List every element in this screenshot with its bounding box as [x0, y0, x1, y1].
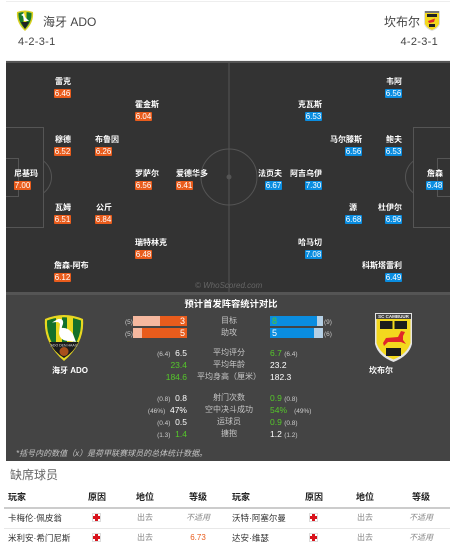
stat: shots label: 射门次数 — [213, 393, 245, 402]
player: away goalkeeper: 詹森 — [427, 169, 443, 178]
row: right 2: 达安·维瑟 — [232, 533, 269, 543]
stat: average age away: 23.2 — [270, 360, 287, 370]
missing players section — [0, 461, 450, 553]
player: home: 雷克 — [55, 77, 71, 86]
player: home — [176, 169, 208, 190]
player: away — [345, 203, 362, 224]
goals bar: home — [125, 316, 187, 326]
table headers: left — [0, 491, 225, 503]
watermark: © WhoScored.com — [195, 281, 262, 290]
player: away — [378, 203, 402, 224]
player: away: 克瓦斯 — [298, 100, 322, 109]
row: left 1 — [0, 512, 225, 524]
icon: injury — [309, 513, 318, 522]
player: away — [362, 261, 402, 282]
player: away: 韦阿 — [386, 77, 402, 86]
icon: ADO crest small — [16, 10, 34, 31]
assists bar: away: 5 — [272, 328, 277, 338]
player: away: 6.49 — [386, 273, 401, 282]
home team name: 海牙 ADO — [43, 15, 96, 29]
player: away: 6.53 — [386, 147, 401, 156]
goals bar: away: (9) — [324, 319, 332, 326]
stat: average rating away: 6.7 (6.4) — [270, 348, 298, 358]
icon: injury — [92, 513, 101, 522]
assists bar: home: 5 — [180, 328, 185, 338]
stats title: 预计首发阵容统计对比 — [185, 299, 277, 309]
player: away — [298, 100, 322, 121]
player: away: 杜伊尔 — [378, 203, 402, 212]
player: away — [290, 169, 322, 190]
stat: shots home: (0.8) 0.8 — [157, 393, 187, 403]
row: right 1: 不适用 — [409, 513, 433, 522]
player: away: 6.56 — [346, 147, 361, 156]
player: home: 穆德 — [55, 135, 71, 144]
stat: average height away: 182.3 — [270, 372, 291, 382]
stat: shots away: 0.9 (0.8) — [270, 393, 298, 403]
player: home: 罗萨尔 — [135, 169, 159, 178]
row: left 1: 卡梅伦·佩皮翁 — [8, 513, 62, 523]
player: away: 7.08 — [306, 250, 321, 259]
player: away goalkeeper: 6.48 — [427, 181, 442, 190]
away formation: 4-2-3-1 — [400, 36, 438, 48]
player: home: 6.04 — [136, 112, 151, 121]
away team name: 坎布尔 — [384, 15, 420, 29]
stat: average height label: 平均身高（厘米） — [197, 372, 261, 381]
player: home: 6.56 — [136, 181, 151, 190]
player: away goalkeeper — [426, 169, 443, 190]
row: right 2 — [225, 532, 450, 544]
player: away: 6.68 — [346, 215, 361, 224]
assists bar: home: (5) — [125, 331, 133, 338]
row: left 2: 出去 — [137, 533, 153, 542]
row: right 2: 不适用 — [409, 533, 433, 542]
player: away: 6.96 — [386, 215, 401, 224]
player: home: 布鲁因 — [95, 135, 119, 144]
icon: Cambuur crest large: SC CAMBUUR — [378, 314, 410, 319]
goals bar: away — [270, 316, 332, 326]
pitch markings — [6, 63, 450, 292]
stat: average age home: 23.4 — [170, 360, 187, 370]
stats comparison panel — [6, 295, 450, 461]
stat: tackles label: 搪抱 — [221, 429, 237, 438]
assists bar: home — [125, 328, 187, 338]
player: home: 6.46 — [55, 89, 70, 98]
player: home goalkeeper — [14, 169, 38, 190]
table headers: right: 玩家 — [232, 492, 250, 502]
player: home: 6.26 — [96, 147, 111, 156]
away team label: 坎布尔 — [369, 366, 393, 375]
player: home goalkeeper: 尼基玛 — [14, 169, 38, 178]
row: left 1: 出去 — [137, 513, 153, 522]
player: away: 阿吉乌伊 — [290, 169, 322, 178]
player: home: 爱德华多 — [176, 169, 208, 178]
stat: dribbles label: 运球员 — [217, 417, 241, 426]
player: home — [54, 77, 71, 98]
player: away — [298, 238, 322, 259]
player: home: 6.41 — [177, 181, 192, 190]
player: home — [135, 169, 159, 190]
player: home goalkeeper: 7.00 — [15, 181, 30, 190]
stat: dribbles home: (0.4) 0.5 — [157, 417, 187, 427]
player: away — [385, 135, 402, 156]
player: home: 6.84 — [96, 215, 111, 224]
player: away — [258, 169, 282, 190]
player: home: 6.12 — [55, 273, 70, 282]
stat: average height home: 184.6 — [166, 372, 187, 382]
header: teams and formations — [6, 1, 450, 61]
row: right 2: 出去 — [357, 533, 373, 542]
stat: aerials label: 空中决斗成功 — [205, 405, 253, 414]
player: home: 公斤 — [96, 203, 112, 212]
icon: Cambuur crest small — [424, 11, 440, 31]
table headers: right — [225, 491, 450, 503]
assists bar: away — [270, 328, 332, 338]
player: home: 6.48 — [136, 250, 151, 259]
section heading: 缺席球员 — [10, 468, 58, 482]
player: home: 詹森-阿布 — [54, 261, 89, 270]
player: away: 7.30 — [306, 181, 321, 190]
player: away: 6.67 — [266, 181, 281, 190]
table headers: right: 原因 — [305, 492, 323, 502]
stat: tackles away: 1.2 (1.2) — [270, 429, 298, 439]
player: away: 源 — [349, 203, 357, 212]
icon: injury — [92, 533, 101, 542]
player: home — [135, 238, 167, 259]
assists label: 助攻 — [221, 328, 237, 337]
player: home — [95, 203, 112, 224]
goals bar: away: 8 — [272, 316, 277, 326]
stat: average rating home: (6.4) 6.5 — [157, 348, 187, 358]
player: away: 哈马切 — [298, 238, 322, 247]
stat: average age label: 平均年龄 — [213, 360, 245, 369]
stat: aerials away: 54% (49%) — [270, 405, 311, 415]
table headers: left: 地位 — [136, 492, 154, 502]
stat: average rating label: 平均评分 — [213, 348, 245, 357]
home team label: 海牙 ADO — [52, 366, 88, 375]
player: home: 6.52 — [55, 147, 70, 156]
footnote: *括号内的数值（x）是荷甲联赛球员的总体统计数据。 — [16, 449, 207, 458]
player: away — [330, 135, 362, 156]
row: left 2 — [0, 532, 225, 544]
player: home — [54, 135, 71, 156]
player: home — [54, 261, 89, 282]
stat: tackles home: (1.3) 1.4 — [157, 429, 187, 439]
goals bar: home: (5) — [125, 319, 133, 326]
pitch panel — [6, 61, 450, 295]
goals bar: home: 3 — [180, 316, 185, 326]
icon: injury — [309, 533, 318, 542]
table headers: right: 等级 — [412, 492, 430, 502]
home formation: 4-2-3-1 — [18, 36, 56, 48]
player: home — [95, 135, 119, 156]
row: left 2: 6.73 — [190, 533, 206, 542]
table headers: left: 原因 — [88, 492, 106, 502]
player: home: 6.51 — [55, 215, 70, 224]
player: away: 鲍夫 — [386, 135, 402, 144]
player: away: 马尔滕斯 — [330, 135, 362, 144]
row: right 1: 出去 — [357, 513, 373, 522]
player: away: 6.53 — [306, 112, 321, 121]
row: right 1: 沃特·阿塞尔曼 — [232, 513, 286, 523]
player: away: 科斯塔雷利 — [362, 261, 402, 270]
assists bar: away: (6) — [324, 331, 332, 338]
row: right 1 — [225, 512, 450, 524]
row: left 2: 米利安·希门尼斯 — [8, 533, 70, 543]
player: away: 6.56 — [386, 89, 401, 98]
icon: ADO crest large: ADO DEN HAAG — [51, 344, 78, 348]
player: away: 法页夫 — [258, 169, 282, 178]
player: away — [385, 77, 402, 98]
goals label: 目标 — [221, 316, 237, 325]
player: home — [54, 203, 71, 224]
player: home: 霍金斯 — [135, 100, 159, 109]
table headers: right: 地位 — [356, 492, 374, 502]
icon: Cambuur crest large — [375, 313, 412, 362]
row: left 1: 不适用 — [186, 513, 210, 522]
player: home — [135, 100, 159, 121]
stat: dribbles away: 0.9 (0.8) — [270, 417, 298, 427]
icon: ADO crest large — [44, 315, 84, 361]
player: home: 瑞特林克 — [135, 238, 167, 247]
stat: aerials home: (46%) 47% — [148, 405, 187, 415]
table headers: left: 玩家 — [8, 492, 26, 502]
player: home: 瓦姆 — [55, 203, 71, 212]
table headers: left: 等级 — [189, 492, 207, 502]
